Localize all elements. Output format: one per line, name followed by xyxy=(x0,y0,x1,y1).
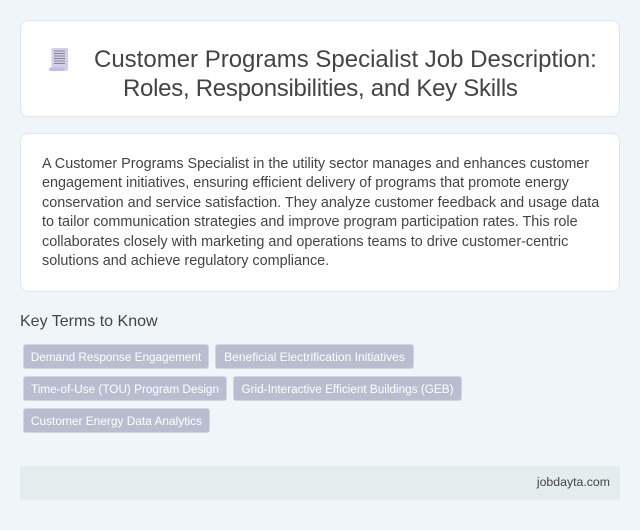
description text: collaborates closely with marketing and operations teams to drive customer-centric xyxy=(42,234,568,250)
panel: title card xyxy=(20,20,620,117)
description text: conservation and service satisfaction. They analyze customer feedback and usage data xyxy=(42,195,599,211)
footer source text: jobdayta.com xyxy=(537,475,610,489)
heading: key terms: Key Terms to Know xyxy=(20,313,158,330)
tag: Grid-Interactive Efficient Buildings (GEB) xyxy=(241,383,454,396)
tag: Customer Energy Data Analytics xyxy=(31,414,202,428)
tag xyxy=(23,376,227,401)
description text: A Customer Programs Specialist in the utility sector manages and enhances customer xyxy=(42,156,589,172)
description text: engagement initiatives, ensuring efficient delivery of programs that promote energy xyxy=(42,175,569,191)
tag xyxy=(215,344,414,369)
footer bar xyxy=(20,466,620,500)
title: Roles, Responsibilities, and Key Skills xyxy=(123,75,518,102)
description text: solutions and achieve regulatory compliance. xyxy=(42,253,329,269)
tag xyxy=(23,344,209,369)
panel: description xyxy=(20,133,620,292)
description text xyxy=(42,156,600,269)
title: Customer Programs Specialist Job Description: xyxy=(94,46,597,73)
title xyxy=(94,46,597,102)
panel: key term tags xyxy=(23,344,462,433)
tag: Beneficial Electrification Initiatives xyxy=(224,350,405,364)
tag xyxy=(23,408,210,433)
tag: Time-of-Use (TOU) Program Design xyxy=(31,383,219,396)
tag xyxy=(233,376,462,401)
tag: Demand Response Engagement xyxy=(31,351,201,364)
description text: to tailor communication strategies and improve program participation rates. This role xyxy=(42,214,578,230)
icon: document scroll xyxy=(49,48,68,71)
